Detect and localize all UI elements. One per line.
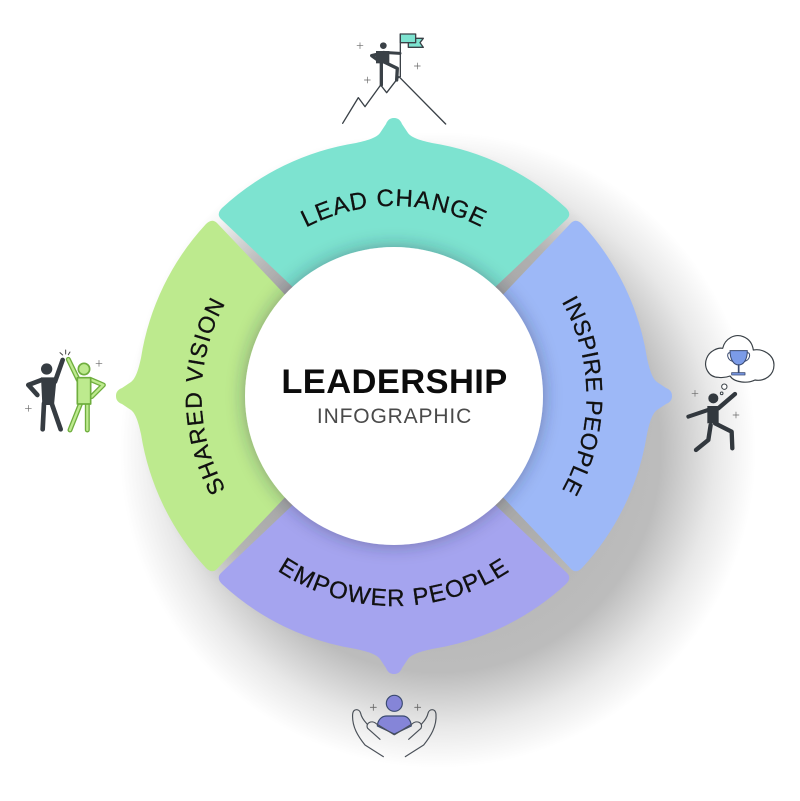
- icon: person held in hands: [353, 695, 436, 757]
- title: LEADERSHIP: [281, 363, 508, 401]
- gap shading: [134, 136, 654, 656]
- cast shadow: [120, 132, 756, 768]
- label: empower people: EMPOWER PEOPLE: [278, 557, 510, 606]
- segment: empower people: [219, 499, 569, 674]
- center circle: [245, 247, 543, 545]
- segment: inspire people: [497, 221, 672, 571]
- icon: thinking of trophy: [688, 336, 774, 450]
- icon: person with flag on mountain: [343, 34, 446, 124]
- segment: shared vision: [116, 221, 291, 571]
- icon: high five: [25, 350, 103, 430]
- label: shared vision: SHARED VISION: [186, 298, 224, 494]
- label: lead change: LEAD CHANGE: [300, 189, 487, 227]
- subtitle: INFOGRAPHIC: [317, 405, 472, 428]
- label: inspire people: INSPIRE PEOPLE: [562, 296, 602, 496]
- segment: lead change: [219, 118, 569, 293]
